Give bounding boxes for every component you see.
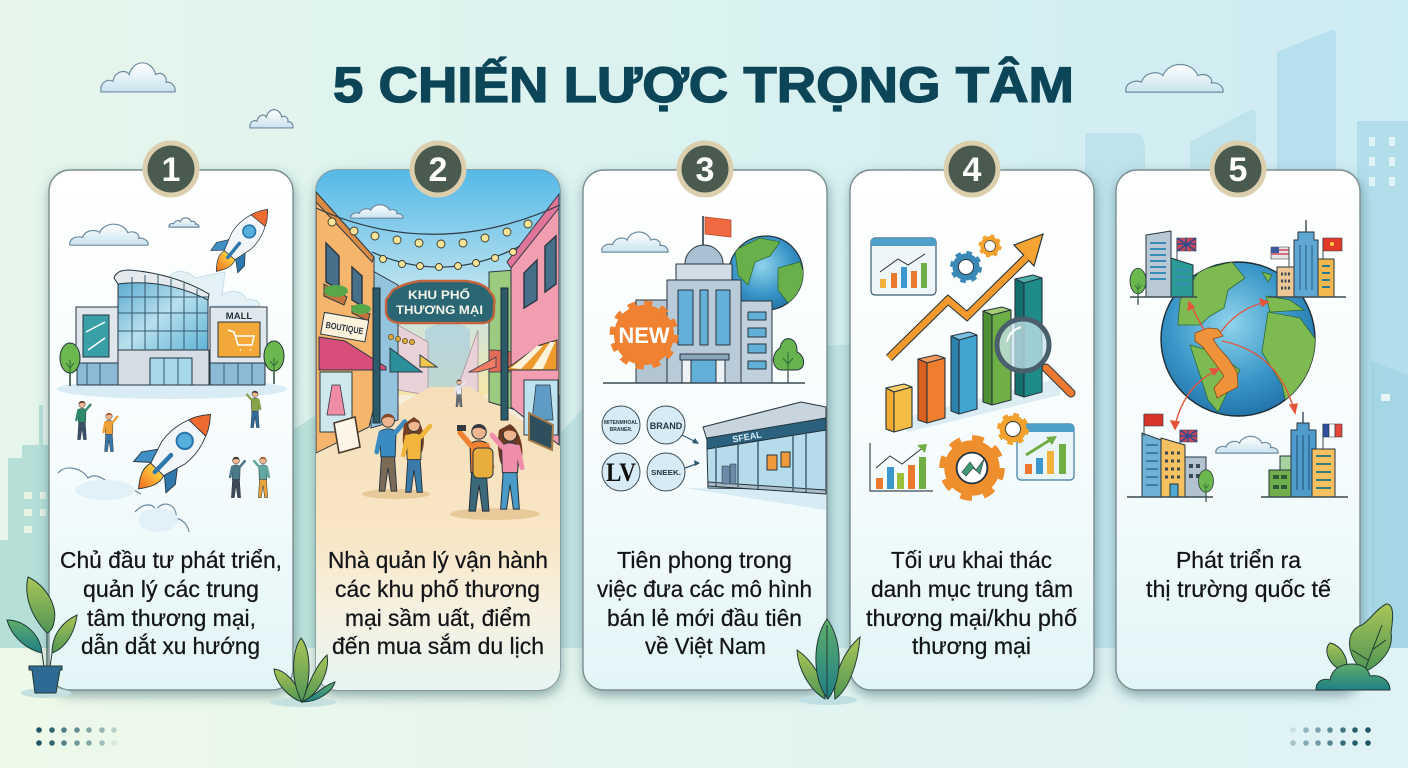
text block 1: quản lý các trung: [83, 576, 259, 602]
panel: strategy 5: [1116, 170, 1360, 690]
number badge 2: [410, 140, 466, 198]
text block 4: [866, 547, 1077, 659]
city top-right: [1268, 220, 1346, 297]
number badge 5: 5: [1229, 151, 1247, 189]
hanging lamps: [388, 334, 415, 345]
text block 4: Tối ưu khai thác: [891, 547, 1052, 573]
text block 1: Chủ đầu tư phát triển,: [60, 547, 282, 573]
card 4 background: [850, 170, 1094, 690]
text block 1: [60, 547, 282, 659]
decorative dots left: [36, 727, 117, 746]
number badge 4: [944, 140, 1000, 198]
ground: [57, 379, 287, 399]
plant: short grass: [270, 638, 336, 707]
panel: strategy 1: [49, 170, 293, 690]
city bottom-right: [1261, 412, 1348, 497]
building: [636, 245, 772, 383]
number badge 3: 3: [696, 151, 714, 189]
text block 1: dẫn dắt xu hướng: [81, 633, 260, 659]
illustration: globe and cities: [1127, 220, 1348, 502]
illustration: new building and globe: [602, 216, 826, 510]
title: 5 CHIẾN LƯỢC TRỌNG TÂM: [333, 57, 1074, 113]
panel: strategy 4: [850, 170, 1094, 690]
shoppers: [362, 380, 540, 520]
plant: potted left: [7, 577, 77, 698]
poles: [373, 288, 508, 423]
panel: strategy 2: [316, 170, 560, 690]
text block 2: các khu phố thương: [335, 576, 540, 602]
brand labels: MITENMHOAL: [604, 420, 638, 426]
growth arrow: [889, 234, 1043, 358]
text block 5: [1146, 547, 1331, 602]
text block 3: [597, 547, 812, 659]
text block 3: việc đưa các mô hình: [597, 576, 812, 602]
awning pink: [319, 337, 386, 370]
card 1 background: [49, 170, 293, 690]
smoke behind mall: [167, 272, 260, 306]
icon: gear on dashboard: [1000, 416, 1026, 442]
text block 2: Nhà quản lý vận hành: [328, 547, 548, 573]
right pink building: [511, 202, 559, 445]
city bottom-left: [1127, 414, 1214, 502]
text block 3: Tiên phong trong: [617, 547, 792, 573]
number badge 1: [142, 140, 200, 198]
mall building: [76, 270, 267, 385]
globe: [1161, 262, 1316, 416]
text block 2: [328, 547, 548, 659]
skyline right tower: [1277, 30, 1336, 648]
boutique sign: BOUTIQUE: [325, 320, 364, 336]
plant: bush right: [1316, 604, 1393, 690]
panel: strategy 3: [583, 170, 827, 690]
people group: [76, 391, 269, 498]
brand labels: [604, 420, 683, 487]
skyline far right: [1357, 121, 1408, 648]
illustration: mall and rockets: MALL: [226, 311, 252, 322]
brand labels: BRANER.: [610, 427, 633, 433]
icon: rocket top: [202, 198, 282, 283]
card 5 background: [1116, 170, 1360, 690]
awning striped: [505, 340, 557, 370]
left building orange: [316, 192, 374, 453]
brand circles: [602, 406, 685, 491]
left building blue: [371, 270, 398, 428]
icon: blue gear: [953, 254, 979, 280]
number badge 3: [676, 140, 734, 198]
skyline right back: [1085, 110, 1256, 648]
street: [316, 387, 560, 690]
text block 2: đến mua sắm du lịch: [332, 633, 544, 659]
decorative cloud small left: [250, 110, 293, 128]
Vietnam map: [1195, 328, 1238, 398]
skyline left-middle: [293, 415, 316, 648]
city top-left: [1130, 231, 1197, 305]
dashboard right: [1017, 424, 1074, 480]
skyline middle: [555, 345, 855, 648]
text block 3: bán lẻ mới đầu tiên: [607, 605, 802, 631]
globe: [729, 236, 803, 310]
right green building: [489, 270, 516, 410]
street sign: THƯƠNG MẠI: [396, 303, 483, 317]
trail clouds: [58, 468, 189, 532]
brand labels: SNEEK.: [651, 470, 681, 477]
text block 1: tâm thương mại,: [87, 605, 256, 631]
card 3 background: [583, 170, 827, 690]
string lights: [316, 205, 560, 267]
shop window left: [320, 372, 352, 432]
illustration: growth analytics: [870, 234, 1074, 495]
text block 5: thị trường quốc tế: [1146, 576, 1331, 602]
brand labels: BRAND: [650, 421, 683, 431]
flag: [702, 216, 704, 248]
tree: [773, 339, 804, 383]
number badge 4: 4: [963, 151, 982, 189]
badge: NEW: NEW: [618, 323, 670, 348]
decorative cloud large left: [101, 63, 175, 92]
skyline right lower: [1371, 361, 1408, 648]
arrows to store: [682, 435, 699, 468]
chart lower left: [870, 443, 933, 491]
illustration: new building and globe: SFEAL: [732, 429, 763, 444]
street sign: [386, 281, 494, 323]
card 2 background: [316, 170, 560, 690]
magnifier: [997, 319, 1071, 393]
cloud: [1216, 436, 1278, 453]
number badge 1: 1: [162, 151, 180, 189]
icon: small gear: [981, 237, 999, 255]
store: [685, 402, 826, 510]
text block 4: danh mục trung tâm: [871, 576, 1073, 602]
windows left: [326, 243, 362, 306]
bars: [886, 275, 1060, 432]
plant: tall leaves: [797, 619, 860, 705]
text block 5: Phát triển ra: [1176, 547, 1301, 573]
sky: [316, 170, 560, 395]
street sign: KHU PHỐ: [408, 287, 470, 302]
brand labels: LV: [606, 458, 636, 487]
text block 2: mại sầm uất, điểm: [345, 605, 531, 631]
a-frame signs: [334, 417, 360, 453]
awning teal: [390, 348, 422, 372]
flower boxes: [324, 284, 370, 321]
boutique sign: [321, 312, 369, 342]
illustration: shopping street: [316, 170, 560, 690]
illustration: mall and rockets: [57, 198, 287, 532]
skyline left: [0, 405, 60, 648]
text block 4: thương mại/khu phố: [866, 605, 1077, 631]
icon: rocket bottom: [122, 398, 227, 505]
number badge 5: [1210, 140, 1266, 198]
text block 4: thương mại: [912, 633, 1031, 659]
expansion arrows: [1171, 299, 1297, 429]
decorative dots right: [1290, 727, 1371, 746]
cloud: [351, 205, 403, 218]
far buildings: [425, 324, 470, 388]
awning yellow: [420, 355, 437, 367]
number badge 2: 2: [429, 151, 447, 189]
badge: NEW: [612, 304, 676, 366]
icon: big gear: [945, 441, 999, 495]
text block 3: về Việt Nam: [645, 633, 766, 659]
dashboard top: [871, 238, 936, 295]
decorative cloud right: [1126, 65, 1223, 92]
